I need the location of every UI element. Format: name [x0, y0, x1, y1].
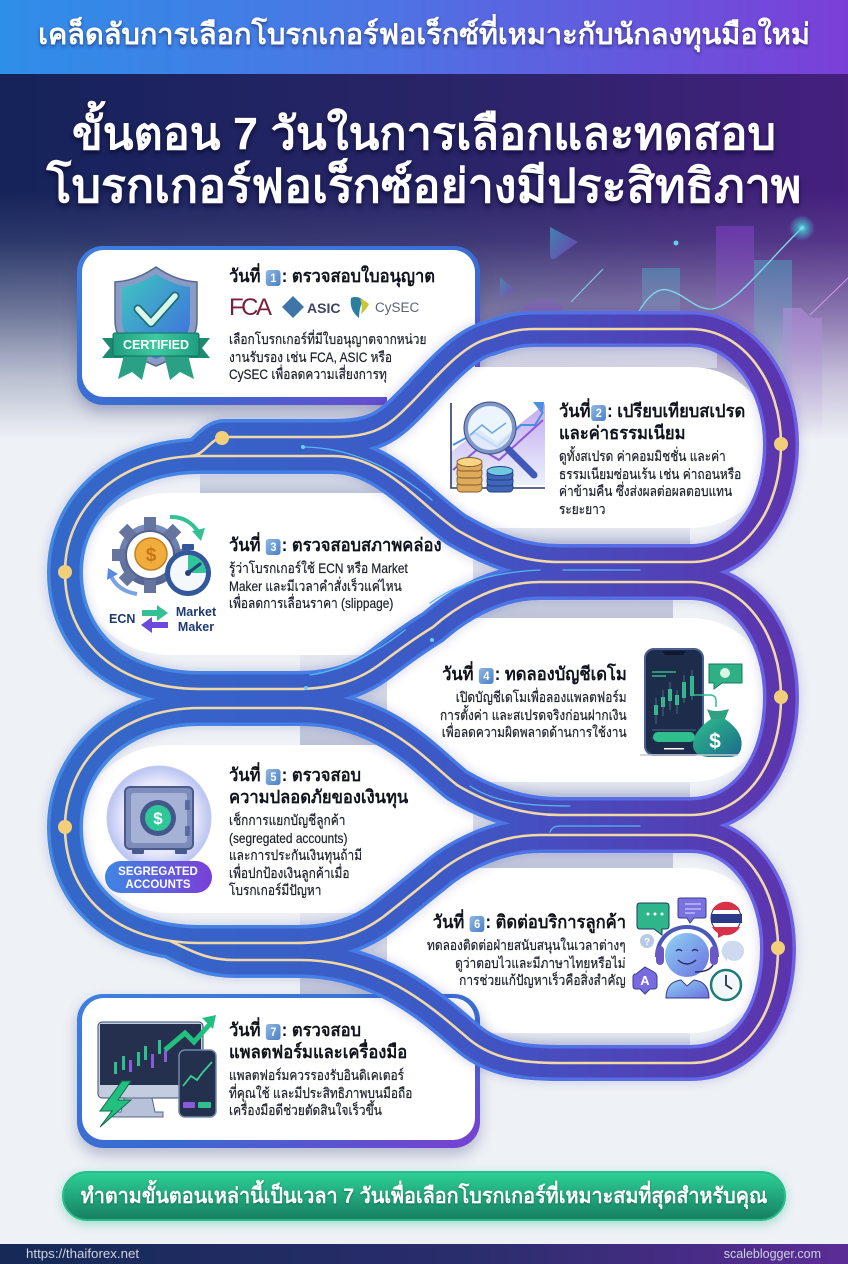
body text: ดูว่าตอบไวและมีภาษาไทยหรือไม่ [456, 954, 626, 970]
body text: เปิดบัญชีเดโมเพื่อลองแพลตฟอร์ม [456, 689, 627, 705]
body text: การช่วยแก้ปัญหาเร็วคือสิ่งสำคัญ [460, 972, 626, 988]
heading: 1 [270, 271, 276, 285]
shadow blocks between road lobes [200, 345, 717, 1053]
closing call to action: ทำตามขั้นตอนเหล่านี้เป็นเวลา 7 วันเพื่อเลือกโบรกเกอร์ที่เหมาะสมที่สุดสำหรับคุณ [81, 1184, 767, 1208]
icon: certified shield: CERTIFIED [123, 338, 189, 352]
panel: day 2 spreads and fees [387, 367, 763, 528]
icon: gear coin stopwatch: Maker [178, 620, 214, 634]
body text: ทดลองติดต่อฝ่ายสนับสนุนในเวลาต่างๆ [427, 937, 626, 953]
heading: 4 [484, 669, 490, 683]
body text [229, 330, 426, 383]
body text: CySEC เพื่อลดความเสี่ยงการทุจริต [229, 366, 408, 382]
main title [45, 100, 802, 212]
regulator logos: FCA [229, 294, 272, 321]
panel: day 6 customer support [387, 868, 760, 1033]
closing call to action [62, 1171, 786, 1221]
heading: 2 [596, 406, 602, 420]
heading: วันที่ : ตรวจสอบ [229, 765, 361, 785]
badge: segregated accounts [105, 861, 212, 893]
badge: segregated accounts: SEGREGATED [118, 866, 198, 878]
body text: Maker และมีเวลาคำสั่งเร็วแค่ไหน [229, 578, 402, 594]
header bar: เคล็ดลับการเลือกโบรกเกอร์ฟอเร็กซ์ที่เหมาะกับนักลงทุนมือใหม่ [38, 19, 810, 51]
regulator logos: ASIC [307, 300, 340, 316]
icon: phone and money bag [640, 649, 742, 757]
body text: เพื่อปกป้องเงินลูกค้าเมื่อ [229, 864, 350, 880]
body text: ธรรมเนียมซ่อนเร้น เช่น ค่าถอนหรือ [559, 466, 741, 482]
heading: 7 [270, 1025, 276, 1039]
body text: และการประกันเงินทุนถ้ามี [229, 847, 362, 863]
heading: วันที่ : ทดลองบัญชีเดโม [442, 664, 627, 684]
body text: โบรกเกอร์มีปัญหา [229, 882, 321, 898]
body text [229, 560, 408, 612]
heading: แพลตฟอร์มและเครื่องมือ [229, 1042, 407, 1062]
background chart decoration [500, 215, 848, 438]
heading: วันที่ : ตรวจสอบสภาพคล่อง [229, 535, 442, 555]
heading: วันที่ : ตรวจสอบใบอนุญาต [229, 266, 435, 286]
footer source left: https://thaiforex.net [26, 1246, 139, 1261]
body text: งานรับรอง เช่น FCA, ASIC หรือ [229, 348, 392, 364]
icon: gear coin stopwatch [107, 517, 217, 634]
panel: day 1 licence [77, 246, 480, 405]
icon: support agent and bubbles [633, 898, 744, 1000]
body text: (segregated accounts) [229, 830, 347, 846]
body text [440, 688, 627, 740]
body text: ระยะยาว [559, 500, 605, 516]
heading: วันที่ : ตรวจสอบ [229, 1020, 361, 1040]
badge: segregated accounts: ACCOUNTS [125, 879, 191, 891]
footer bar [0, 1244, 848, 1264]
body text: เพื่อลดความผิดพลาดด้านการใช้งาน [442, 724, 627, 740]
icon: safe in bubble: $ [153, 809, 163, 828]
road light streaks [303, 447, 640, 832]
icon: gear coin stopwatch: ECN [109, 612, 135, 626]
icon: gear coin stopwatch: $ [146, 545, 157, 566]
header bar [0, 0, 848, 74]
main title: โบรกเกอร์ฟอเร็กซ์อย่างมีประสิทธิภาพ [47, 160, 801, 212]
heading: 3 [270, 540, 276, 554]
body text [229, 812, 362, 898]
body text [559, 446, 741, 516]
panel: day 7 platform and tools [77, 994, 480, 1148]
heading: และค่าธรรมเนียม [559, 423, 686, 443]
main title: ขั้นตอน 7 วันในการเลือกและทดสอบ [72, 108, 776, 159]
icon: support agent and bubbles: ? [644, 937, 650, 948]
regulator logos: CySEC [375, 300, 420, 315]
panel: day 5 fund safety [83, 745, 473, 913]
body text: เช็กการแยกบัญชีลูกค้า [229, 812, 345, 828]
road nodes [58, 431, 788, 955]
footer source right: scaleblogger.com [724, 1247, 821, 1261]
heading: วันที่ : ติดต่อบริการลูกค้า [433, 912, 626, 932]
body text [229, 1067, 412, 1118]
body text: แพลตฟอร์มควรรองรับอินดิเคเตอร์ [229, 1067, 404, 1083]
panel: day 3 liquidity [83, 493, 473, 655]
heading: 6 [474, 917, 480, 931]
body text: ที่คุณใช้ และมีประสิทธิภาพบนมือถือ [229, 1084, 412, 1100]
regulator logos [229, 294, 420, 321]
icon: certified shield [102, 267, 210, 380]
body text: ค่าข้ามคืน ซึ่งส่งผลต่อผลตอบแทน [559, 483, 732, 499]
heading: 5 [270, 770, 276, 784]
heading [229, 762, 408, 808]
icon: monitor phone arrow bolt [98, 1015, 216, 1127]
body text: เลือกโบรกเกอร์ที่มีใบอนุญาตจากหน่วย [229, 331, 426, 347]
body text: การตั้งค่า และสเปรดจริงก่อนฝากเงิน [440, 706, 627, 722]
body text [427, 937, 626, 988]
icon: safe in bubble [107, 766, 211, 870]
heading [559, 398, 745, 443]
body text: ดูทั้งสเปรด ค่าคอมมิชชั่น และค่า [559, 448, 726, 464]
icon: support agent and bubbles: A [640, 973, 650, 988]
road band [65, 329, 781, 1063]
heading: ความปลอดภัยของเงินทุน [229, 787, 408, 807]
heading [229, 1017, 407, 1062]
body text: เครื่องมือดีช่วยตัดสินใจเร็วขึ้น [229, 1102, 382, 1118]
panel: day 4 demo account [387, 618, 763, 782]
heading: วันที่ : เปรียบเทียบสเปรด [559, 401, 745, 421]
body text: รู้ว่าโบรกเกอร์ใช้ ECN หรือ Market [229, 560, 408, 576]
icon: phone and money bag: $ [709, 730, 721, 753]
icon: magnifier chart and coins [451, 402, 545, 492]
icon: gear coin stopwatch: Market [176, 605, 217, 619]
body text: เพื่อลดการเลื่อนราคา (slippage) [229, 595, 393, 611]
